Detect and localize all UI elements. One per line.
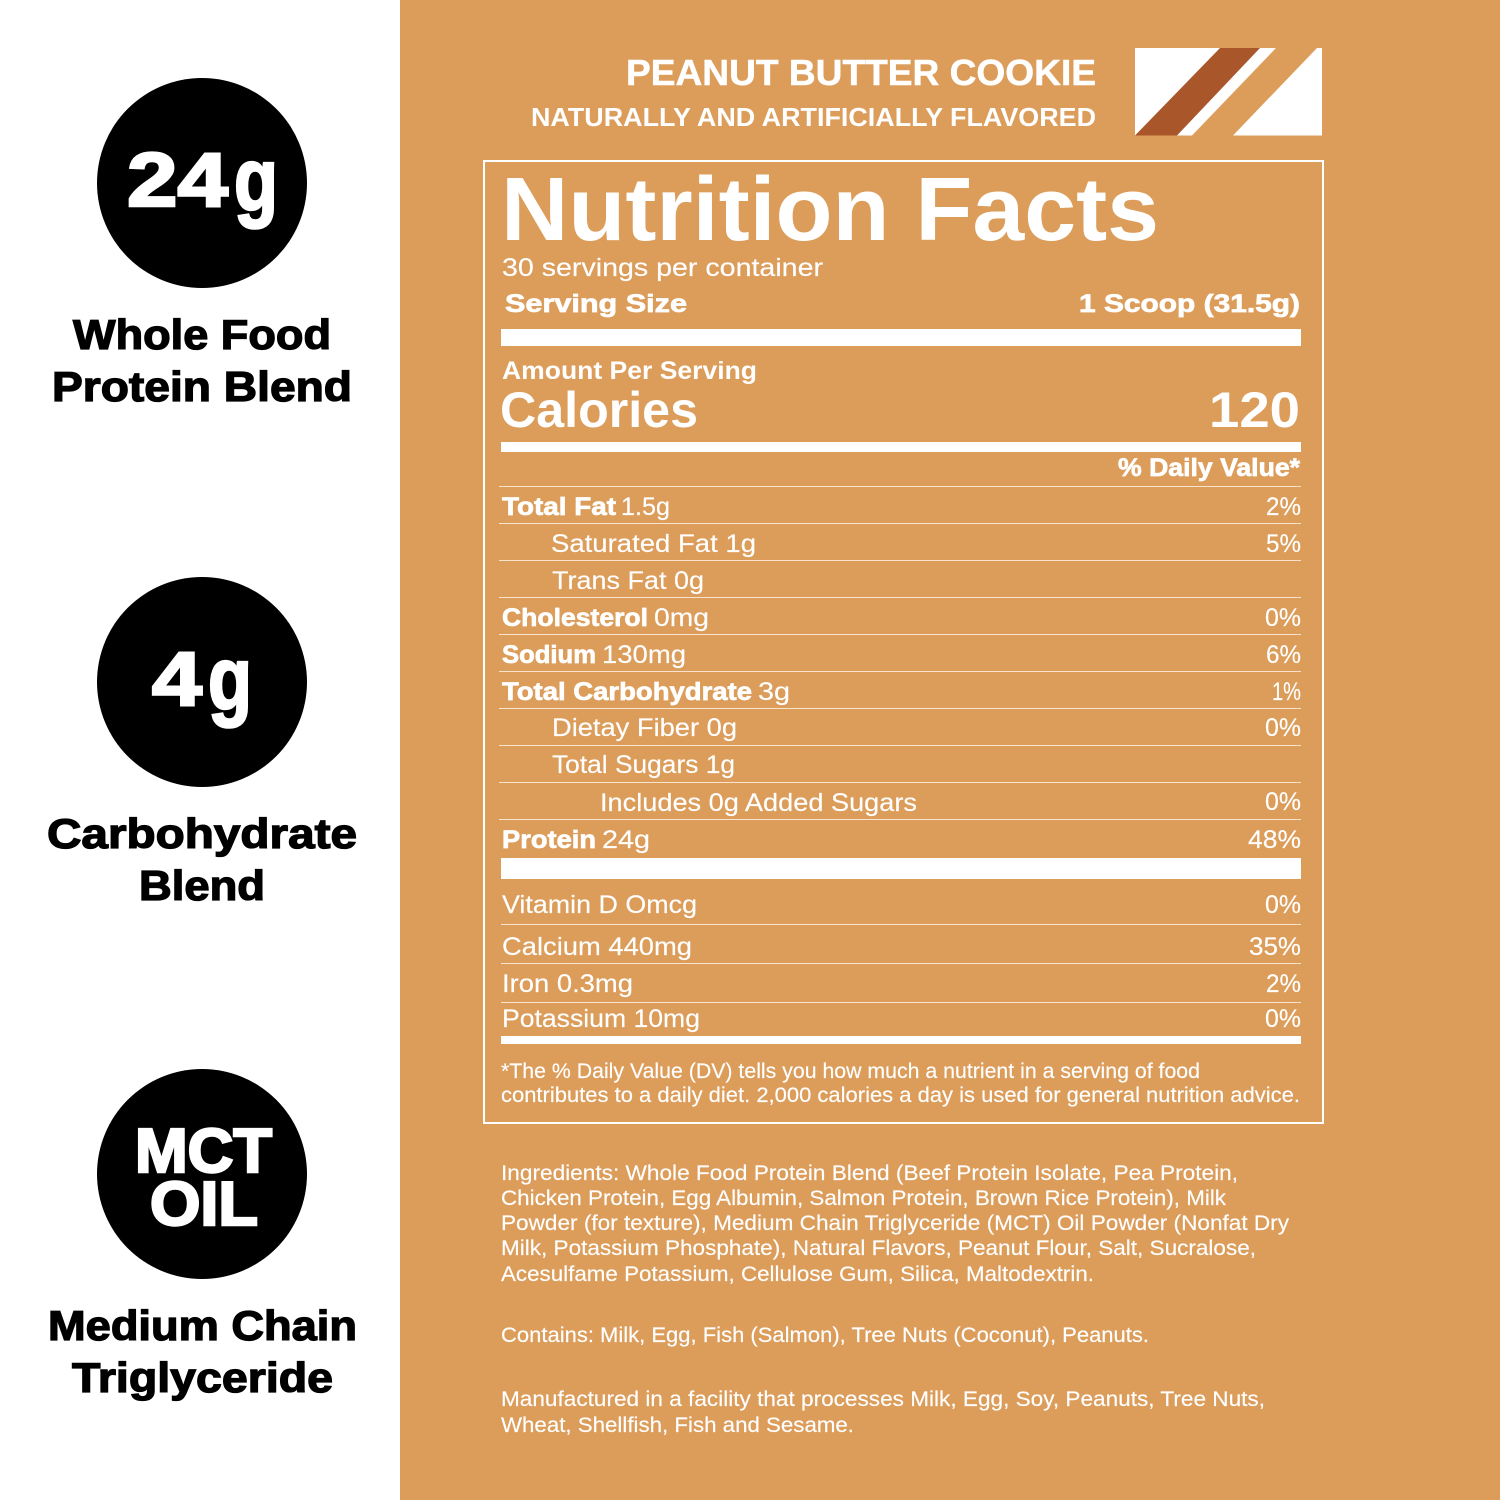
protein: 24g [602,826,650,854]
flavor heading: PEANUT BUTTER COOKIE [626,52,1096,93]
total fat [502,493,1301,521]
total fat: 1.5g [621,493,670,521]
facility statement [501,1388,1265,1437]
label: medium chain triglyceride: Triglyceride [72,1354,333,1401]
vitamin d: 0% [1265,891,1301,919]
iron [502,970,1301,998]
calories row [500,382,1300,438]
label: medium chain triglyceride: Medium Chain [48,1302,357,1349]
sodium: 6% [1266,641,1301,669]
amount per serving: Amount Per Serving [502,357,757,385]
badge: 4g carbohydrate: 4 [152,637,202,722]
vitamin d [502,891,1301,919]
cholesterol: 0% [1265,604,1301,632]
added sugars [600,788,1301,817]
badge: 4g carbohydrate [97,577,307,787]
serving size row: 1 Scoop (31.5g) [1079,290,1300,318]
total fat: 2% [1266,493,1301,521]
potassium [502,1005,1301,1033]
divider [501,1036,1301,1044]
label: medium chain triglyceride [48,1302,357,1401]
calcium: Calcium 440mg [502,933,692,961]
ingredients text [501,1162,1290,1286]
protein: 48% [1248,826,1301,854]
label: whole food protein blend: Whole Food [73,311,331,358]
label: whole food protein blend [52,311,352,410]
flavor heading [531,52,1096,132]
protein: Protein [502,826,596,854]
badge: MCT oil [97,1069,307,1279]
daily value footnote: *The % Daily Value (DV) tells you how much a nutrient in a serving of food [501,1060,1200,1083]
daily value footnote [501,1060,1300,1107]
dietary fiber: Dietay Fiber 0g [552,714,737,742]
nutrition facts panel [484,160,1323,1123]
total sugars: Total Sugars 1g [552,751,735,779]
badge: 24g protein: g [234,130,278,229]
sodium: Sodium [502,641,596,669]
thick divider [501,329,1301,346]
calories row: Calories [500,382,698,438]
label: carbohydrate blend: Carbohydrate [47,810,357,857]
row dividers [499,486,1301,1003]
flavor heading: NATURALLY AND ARTIFICIALLY FLAVORED [531,102,1096,132]
total carbohydrate: 3g [758,678,790,706]
serving size row: Serving Size [505,290,687,318]
facility statement: Wheat, Shellfish, Fish and Sesame. [501,1414,854,1437]
label: carbohydrate blend [47,810,357,909]
orange background panel [400,0,1500,1500]
ingredients text: Chicken Protein, Egg Albumin, Salmon Protein, Brown Rice Protein), Milk [501,1187,1227,1210]
dietary fiber: 0% [1265,714,1301,742]
potassium: 0% [1265,1005,1301,1033]
daily value header: % Daily Value* [1118,454,1300,482]
iron: 2% [1266,970,1301,998]
calories row: 120 [1209,382,1300,438]
dietary fiber [552,714,1301,742]
trans fat: Trans Fat 0g [552,567,704,595]
divider [501,442,1301,452]
label: whole food protein blend: Protein Blend [52,363,352,410]
cholesterol: Cholesterol [502,604,648,632]
total carbohydrate: Total Carbohydrate [502,678,752,706]
serving size row [505,290,1300,318]
facility statement: Manufactured in a facility that processes Milk, Egg, Soy, Peanuts, Tree Nuts, [501,1388,1265,1411]
allergen statement: Contains: Milk, Egg, Fish (Salmon), Tree Nuts (Coconut), Peanuts. [501,1324,1149,1347]
badge: MCT oil: MCT [135,1117,272,1186]
cholesterol [502,604,1301,632]
added sugars: Includes 0g Added Sugars [600,789,917,817]
label: carbohydrate blend: Blend [139,862,265,909]
icon: flavor stripes [1135,48,1322,136]
total carbohydrate: 1% [1272,678,1301,706]
total carbohydrate [502,678,1301,706]
saturated fat: Saturated Fat 1g [551,530,756,558]
servings per container: 30 servings per container [502,254,823,282]
ingredients text: Milk, Potassium Phosphate), Natural Flavors, Peanut Flour, Salt, Sucralose, [501,1237,1256,1260]
saturated fat [551,530,1301,558]
ingredients text: Powder (for texture), Medium Chain Triglyceride (MCT) Oil Powder (Nonfat Dry [501,1212,1290,1235]
thick divider [501,858,1301,879]
cholesterol: 0mg [654,604,709,632]
sodium [502,641,1301,669]
saturated fat: 5% [1266,530,1301,558]
ingredients text: Acesulfame Potassium, Cellulose Gum, Silica, Maltodextrin. [501,1263,1094,1286]
title: Nutrition Facts [501,160,1159,260]
badge: 4g carbohydrate: g [208,629,252,728]
badge: 24g protein [97,78,307,288]
calcium [502,933,1301,961]
calcium: 35% [1249,933,1301,961]
badge: MCT oil: OIL [150,1170,258,1239]
protein [502,826,1301,854]
potassium: Potassium 10mg [502,1005,700,1033]
sodium: 130mg [602,641,686,669]
iron: Iron 0.3mg [502,970,633,998]
vitamin d: Vitamin D Omcg [502,891,697,919]
total fat: Total Fat [502,493,617,521]
badge: 24g protein: 24 [127,138,228,223]
ingredients text: Ingredients: Whole Food Protein Blend (Beef Protein Isolate, Pea Protein, [501,1162,1238,1185]
daily value footnote: contributes to a daily diet. 2,000 calories a day is used for general nutrition advice. [501,1084,1300,1107]
added sugars: 0% [1265,788,1301,816]
left column: key ingredients [47,78,357,1401]
